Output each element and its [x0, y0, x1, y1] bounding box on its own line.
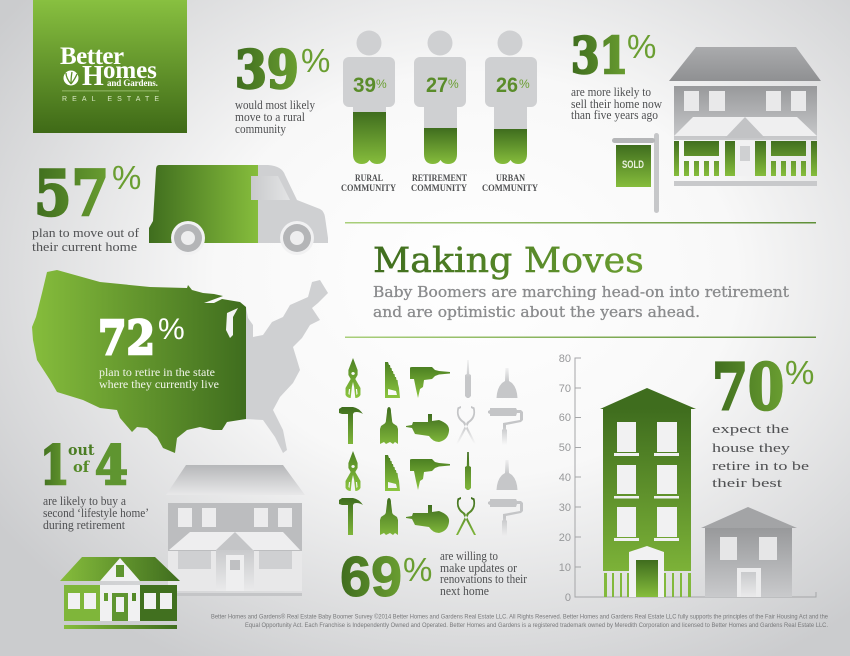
stat: 31 percent sell: are more likely to [571, 84, 651, 99]
icon: grey and green house [669, 47, 821, 186]
icon: faded large house [166, 465, 305, 596]
stat: 72 percent retire: where they currently live [99, 377, 219, 391]
chart: axis: 60 [559, 412, 571, 424]
person: rural community: RURAL [355, 173, 383, 183]
panel: logo [33, 0, 187, 133]
stat: 1 out of 4: 1 [40, 435, 69, 497]
stat: 1 out of 4: of [73, 458, 91, 476]
stat: 72 percent retire: % [158, 313, 185, 346]
stat: 69 percent renovate: are willing to [440, 548, 498, 563]
stat: 70 percent best house: 70 [712, 349, 784, 424]
subtitle [373, 283, 789, 321]
stat: 69 percent renovate: 69 [340, 544, 402, 608]
icon: sold sign [612, 133, 659, 213]
icon: moving van [149, 165, 328, 255]
chart: axis: 80 [559, 353, 571, 365]
stat: 70 percent best house: their best [712, 475, 783, 490]
stat: 31 percent sell: 31 [571, 26, 628, 85]
stat: 1 out of 4: second ‘lifestyle home’ [43, 505, 149, 520]
person: rural community: % [376, 77, 387, 91]
person: retirement community: COMMUNITY [411, 183, 467, 193]
subtitle: Baby Boomers are marching head-on into retirement [373, 283, 789, 301]
logo wordmark [60, 43, 159, 103]
icon: small green house [60, 557, 180, 629]
person: urban community: % [519, 77, 530, 91]
stat: 70 percent best house [712, 349, 814, 490]
stat: 31 percent sell: than five years ago [571, 107, 658, 122]
stat: 1 out of 4: 4 [95, 434, 128, 497]
person: retirement community [411, 30, 467, 193]
icon: pliers top [346, 358, 360, 398]
stat: 69 percent renovate [340, 544, 528, 608]
person: rural community: COMMUNITY [341, 183, 396, 193]
stat: 57 percent move: plan to move out of [32, 225, 140, 240]
stat: 31 percent sell: sell their home now [571, 96, 663, 111]
stat: 1 out of 4: are likely to buy a [43, 493, 126, 508]
chart: axis: 40 [559, 472, 571, 484]
tools grid [339, 358, 523, 536]
stat: 57 percent move: % [112, 159, 141, 196]
logo wordmark: REAL ESTATE [62, 96, 159, 103]
stat: 69 percent renovate: % [403, 551, 432, 588]
chart: axis: 70 [559, 383, 571, 395]
person: urban community: 26 [496, 74, 518, 97]
stat: 39 percent rural: community [235, 121, 286, 136]
stat: 70 percent best house: % [785, 354, 814, 391]
chart: axis: 20 [559, 532, 571, 544]
stat: 69 percent renovate: next home [440, 583, 489, 598]
stat: 39 percent rural: move to a rural [235, 109, 305, 124]
stat: 72 percent retire: 72 [98, 311, 155, 366]
stat: 39 percent rural [235, 39, 330, 136]
subtitle: and are optimistic about the years ahead. [373, 303, 700, 321]
stat: 1 out of 4 [40, 434, 149, 532]
person: urban community [482, 30, 538, 193]
footer disclaimer [211, 614, 829, 629]
stat: 39 percent rural: % [301, 42, 330, 79]
chart: axis [559, 353, 816, 604]
chart: axis: 30 [559, 502, 571, 514]
stat: 39 percent rural: would most likely [235, 97, 315, 112]
stat: 57 percent move [32, 156, 141, 254]
logo wordmark: omes [103, 57, 157, 84]
person: urban community: COMMUNITY [482, 183, 538, 193]
person: retirement community: % [448, 77, 459, 91]
icon: tall green building [600, 388, 696, 597]
stat: 57 percent move: their current home [32, 239, 137, 254]
stat: 70 percent best house: expect the [712, 421, 789, 436]
person: retirement community: 27 [426, 74, 448, 97]
stat: 69 percent renovate: renovations to their [440, 571, 528, 586]
title: Making Moves [373, 241, 644, 281]
footer disclaimer: Better Homes and Gardens® Real Estate Baby Boomer Survey ©2014 Better Homes and Gardens Real Estate LLC. All Rights Reserved. Better Homes and Gardens Real Estate LLC fully supports the principles of the Fair Housing Act and the [211, 614, 829, 620]
person: urban community: URBAN [496, 173, 525, 183]
stat: 57 percent move: 57 [34, 156, 109, 230]
icon: small grey house [701, 507, 797, 597]
stat: 70 percent best house: house they [712, 440, 791, 455]
stat: 70 percent best house: retire in to be [712, 458, 809, 473]
logo wordmark: H [82, 61, 104, 92]
stat: 1 out of 4: during retirement [43, 517, 125, 532]
stat: 72 percent retire [98, 311, 219, 391]
chart: axis: 0 [565, 592, 571, 604]
stat: 69 percent renovate: make updates or [440, 560, 518, 575]
divider and heading [345, 222, 816, 338]
map: united states [32, 270, 328, 453]
stat: 1 out of 4: out [68, 442, 95, 459]
person: retirement community: RETIREMENT [412, 173, 467, 183]
chart: axis: 10 [559, 562, 571, 574]
person: rural community: 39 [353, 74, 376, 97]
footer disclaimer: Equal Opportunity Act. Each Franchise is Independently Owned and Operated. Better Homes and Gardens is a registered trademark owned by Meredith Corporation and licensed to Better Homes and Gardens Real Estate LLC. [245, 623, 828, 629]
stat: 31 percent sell [571, 26, 663, 122]
person: rural community [341, 30, 396, 193]
stat: 72 percent retire: plan to retire in the state [99, 365, 215, 379]
logo wordmark: Better [60, 43, 124, 70]
stat: 31 percent sell: % [627, 28, 656, 65]
logo wordmark: and Gardens. [107, 78, 158, 88]
chart: axis: 50 [559, 442, 571, 454]
stat: 39 percent rural: 39 [235, 39, 299, 101]
icon: sold sign: SOLD [622, 159, 644, 171]
